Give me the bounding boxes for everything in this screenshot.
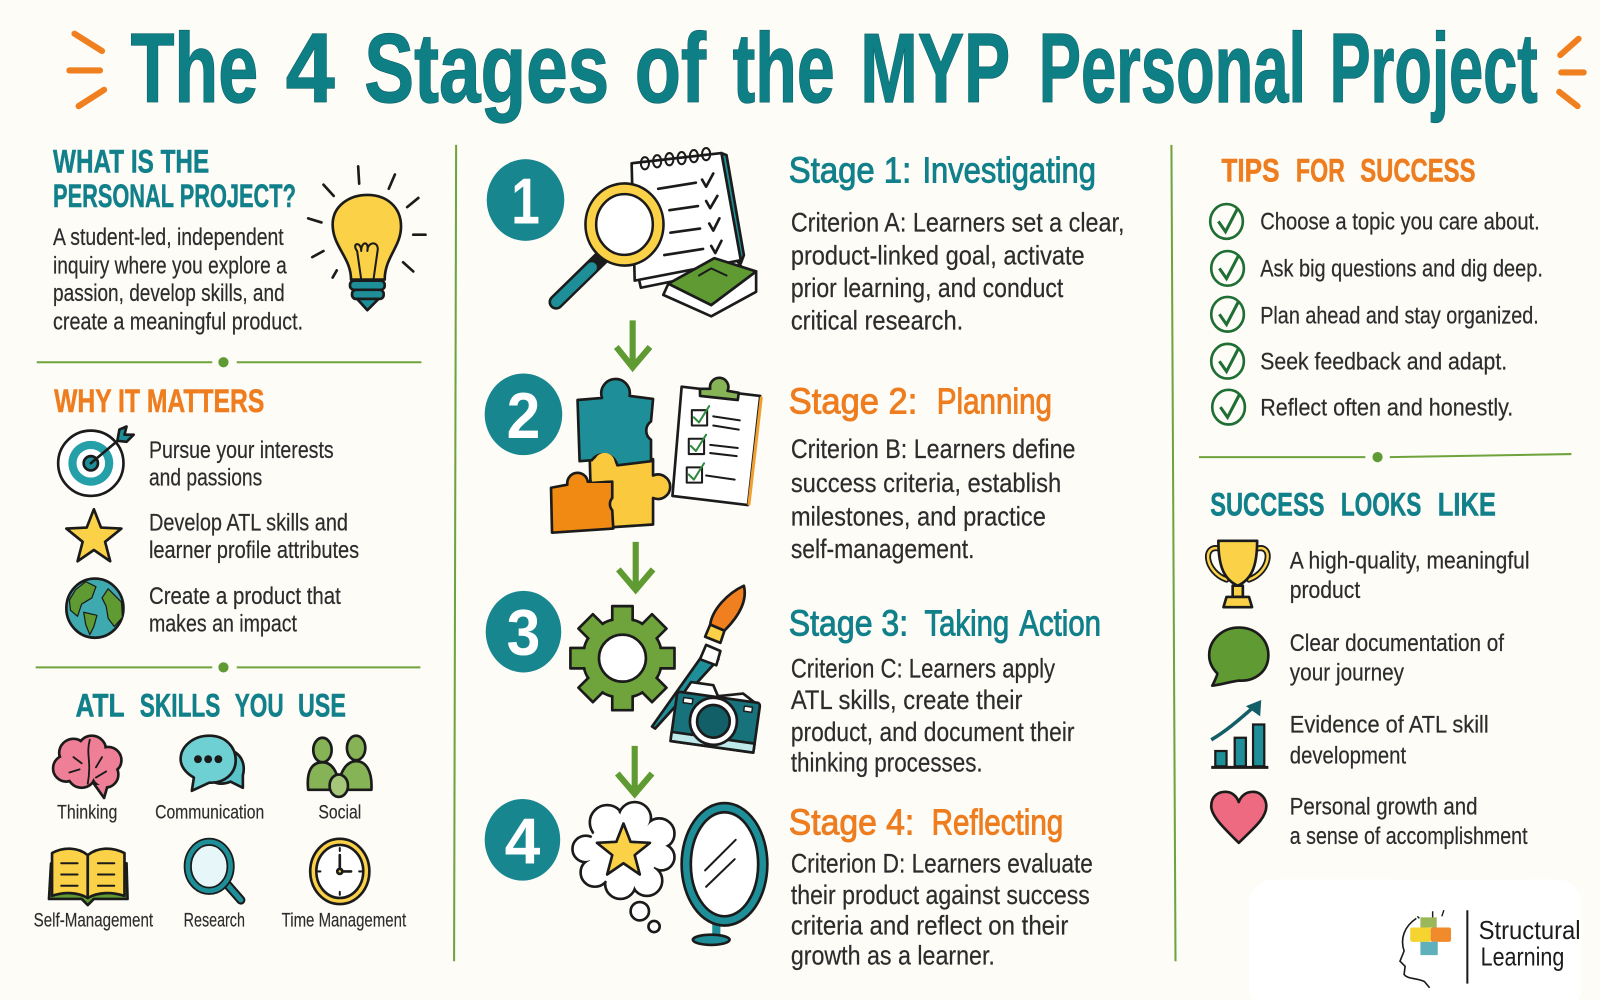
tip 4 bbox=[1211, 344, 1507, 379]
label: thinking: Thinking bbox=[57, 801, 117, 823]
text: criterion C: Criterion C: Learners apply bbox=[791, 654, 1056, 684]
logo wordmark bbox=[1479, 917, 1581, 971]
tip 3 bbox=[1211, 297, 1539, 332]
heading: success: SUCCESS bbox=[1210, 485, 1324, 522]
text: growth: Personal growth and bbox=[1290, 793, 1478, 820]
text: interests: and passions bbox=[149, 465, 262, 492]
tip 5 bbox=[1212, 390, 1513, 424]
text: interests bbox=[149, 437, 334, 492]
title: of bbox=[635, 13, 706, 123]
text: product impact: Create a product that bbox=[149, 583, 341, 610]
text: criterion D: criteria and reflect on their bbox=[791, 911, 1069, 941]
arrow: stage 1 to 2 bbox=[616, 320, 650, 367]
heading: stage 2 bbox=[789, 381, 1052, 421]
text: product: A high-quality, meaningful bbox=[1290, 547, 1530, 574]
icon: globe bbox=[66, 579, 123, 638]
icon: left title rays bbox=[69, 34, 104, 106]
heading: what is the personal project: WHAT IS THE bbox=[53, 142, 209, 179]
icon: brain bbox=[53, 736, 121, 798]
text: product: product bbox=[1290, 577, 1360, 604]
icon: clock bbox=[310, 839, 369, 904]
panel: tips for success bbox=[1210, 152, 1543, 424]
text block: definition: A student-led, independent bbox=[53, 224, 284, 251]
title: MYP bbox=[860, 13, 1010, 123]
icon: bar chart with arrow bbox=[1211, 700, 1268, 767]
icon: gear bbox=[570, 606, 674, 710]
text: criterion C: ATL skills, create their bbox=[791, 685, 1023, 715]
label: self-management: Self-Management bbox=[34, 910, 154, 932]
text block: definition: inquiry where you explore a bbox=[53, 252, 287, 279]
tip 1: Choose a topic you care about. bbox=[1260, 209, 1540, 236]
logo wordmark: Learning bbox=[1481, 943, 1564, 971]
notepad spiral bbox=[641, 148, 710, 169]
text: criterion A bbox=[791, 208, 1124, 336]
text: criterion B: Criterion B: Learners define bbox=[791, 434, 1076, 464]
panel: ATL skills you use bbox=[34, 686, 407, 932]
text: criterion B: self-management. bbox=[791, 534, 974, 564]
text: ATL skills: Develop ATL skills and bbox=[149, 510, 348, 537]
heading: what is the personal project bbox=[53, 142, 296, 214]
text: criterion B bbox=[791, 434, 1076, 564]
heading: stage 3: Stage 3: bbox=[789, 604, 908, 644]
title: Stages bbox=[364, 13, 609, 123]
icon: star bbox=[66, 509, 121, 561]
tip 2: Ask big questions and dig deep. bbox=[1260, 256, 1543, 283]
text block: definition: create a meaningful product. bbox=[53, 309, 303, 336]
text: ATL skills: learner profile attributes bbox=[149, 537, 359, 564]
tip 3: Plan ahead and stay organized. bbox=[1260, 302, 1539, 329]
text: criterion B: milestones, and practice bbox=[791, 502, 1046, 532]
panel: why it matters bbox=[54, 382, 359, 638]
tip 2 bbox=[1211, 251, 1543, 286]
number badge 2 bbox=[485, 373, 562, 455]
heading: stage 4: Stage 4: bbox=[789, 803, 914, 843]
title: Personal bbox=[1039, 13, 1306, 123]
text: criterion D: Criterion D: Learners evaluate bbox=[791, 848, 1093, 878]
number badge 2: 2 bbox=[507, 379, 540, 452]
heading: success: LOOKS bbox=[1341, 485, 1421, 522]
heading: success: LIKE bbox=[1438, 485, 1496, 522]
number badge 4: 4 bbox=[505, 804, 540, 877]
text: evidence: development bbox=[1290, 742, 1406, 769]
text: criterion D: their product against success bbox=[791, 880, 1090, 910]
tip 1 bbox=[1210, 204, 1540, 239]
text: criterion D: growth as a learner. bbox=[791, 940, 995, 970]
text: evidence bbox=[1290, 712, 1489, 769]
heading: stage 3: Taking bbox=[924, 604, 1009, 644]
title: The bbox=[131, 13, 258, 123]
heading: ATL skills: ATL bbox=[76, 686, 124, 723]
heading: stage 4: Reflecting bbox=[932, 803, 1063, 843]
icon: heart bbox=[1211, 792, 1266, 843]
heading: stage 3 bbox=[789, 604, 1101, 644]
number badge 3 bbox=[486, 591, 561, 672]
label: time management: Time Management bbox=[282, 910, 407, 932]
panel: stage 3 taking action bbox=[486, 586, 1101, 777]
icon: communication bubbles bbox=[181, 736, 244, 791]
text: product bbox=[1290, 547, 1530, 604]
heading: stage 4 bbox=[789, 803, 1063, 843]
heading: ATL skills: YOU bbox=[235, 686, 284, 723]
heading: stage 1 bbox=[789, 151, 1096, 191]
panel: what is the personal project bbox=[53, 142, 426, 336]
icon: trophy bbox=[1208, 541, 1268, 607]
panel: stage 1 investigating bbox=[487, 148, 1124, 336]
tip 5: Reflect often and honestly. bbox=[1260, 394, 1513, 421]
heading: ATL skills: USE bbox=[298, 686, 346, 723]
heading: success bbox=[1210, 485, 1496, 522]
text: interests: Pursue your interests bbox=[149, 437, 334, 464]
icon: head outline with blocks bbox=[1400, 910, 1451, 988]
icon: mirror bbox=[682, 803, 767, 945]
text: criterion C: product, and document their bbox=[791, 717, 1075, 747]
panel: Structural Learning logo bbox=[1249, 880, 1582, 1000]
text: ATL skills bbox=[149, 510, 359, 564]
icon: camera bbox=[670, 680, 762, 753]
text: criterion B: success criteria, establish bbox=[791, 468, 1061, 498]
icon: light bulb bbox=[308, 166, 426, 310]
panel: stage 2 planning bbox=[485, 373, 1076, 564]
icon: paintbrush bbox=[652, 586, 745, 729]
text block: definition: passion, develop skills, and bbox=[53, 280, 285, 307]
icon: clipboard checklist bbox=[672, 378, 761, 505]
icon: target bbox=[58, 427, 134, 496]
text: criterion C: thinking processes. bbox=[791, 747, 983, 777]
heading: tips: SUCCESS bbox=[1360, 152, 1476, 189]
number badge 1 bbox=[487, 159, 564, 241]
icon: speech bubble bbox=[1209, 628, 1268, 686]
title: 4 bbox=[286, 13, 335, 123]
text: evidence: Evidence of ATL skill bbox=[1290, 712, 1489, 739]
text: criterion A: critical research. bbox=[791, 306, 963, 336]
text: documentation bbox=[1290, 630, 1504, 687]
text: criterion A: Criterion A: Learners set a clear, bbox=[791, 208, 1124, 238]
text: product impact bbox=[149, 583, 341, 638]
text: documentation: your journey bbox=[1290, 660, 1405, 687]
title: the bbox=[733, 13, 835, 123]
text: criterion D bbox=[791, 848, 1093, 970]
heading: stage 1: Stage 1: bbox=[789, 151, 911, 191]
icon: thought cloud with star bbox=[572, 802, 674, 932]
tip 4: Seek feedback and adapt. bbox=[1260, 348, 1507, 375]
icon: notepad and magnifier with book bbox=[556, 148, 756, 316]
text block: definition bbox=[53, 224, 303, 336]
heading: stage 2: Stage 2: bbox=[789, 381, 917, 421]
arrow: stage 3 to 4 bbox=[617, 746, 652, 794]
heading: ATL skills: SKILLS bbox=[140, 686, 220, 723]
heading: ATL skills bbox=[76, 686, 346, 723]
title bbox=[131, 13, 1538, 123]
label: communication: Communication bbox=[155, 801, 264, 823]
text: criterion A: product-linked goal, activate bbox=[791, 240, 1085, 270]
heading: stage 1: Investigating bbox=[922, 151, 1096, 191]
panel: success looks like bbox=[1208, 485, 1530, 850]
number badge 1: 1 bbox=[511, 164, 540, 237]
heading: what is the personal project: PERSONAL PROJECT? bbox=[53, 177, 296, 214]
number badge 4 bbox=[485, 799, 560, 881]
number badge 3: 3 bbox=[507, 596, 540, 669]
icon: research magnifier bbox=[188, 842, 241, 900]
text: product impact: makes an impact bbox=[149, 611, 297, 638]
icon: open book bbox=[49, 849, 128, 905]
logo wordmark: Structural bbox=[1479, 917, 1581, 945]
text: growth bbox=[1290, 793, 1528, 850]
label: research: Research bbox=[184, 910, 245, 932]
text: growth: a sense of accomplishment bbox=[1290, 823, 1528, 850]
text: criterion C bbox=[791, 654, 1075, 777]
label: social: Social bbox=[318, 801, 361, 823]
arrow: stage 2 to 3 bbox=[618, 542, 653, 590]
heading: tips: TIPS bbox=[1221, 152, 1280, 189]
text: criterion A: prior learning, and conduct bbox=[791, 273, 1064, 303]
heading: stage 2: Planning bbox=[937, 381, 1052, 421]
heading: stage 3: Action bbox=[1019, 604, 1101, 644]
icon: right title rays bbox=[1559, 39, 1584, 106]
text: documentation: Clear documentation of bbox=[1290, 630, 1504, 657]
icon: social people bbox=[308, 736, 372, 797]
heading: tips bbox=[1221, 152, 1476, 189]
panel: stage 4 reflecting bbox=[485, 799, 1093, 970]
icon: puzzle pieces bbox=[551, 379, 670, 533]
heading: tips: FOR bbox=[1296, 152, 1345, 189]
heading: why it matters: WHY IT MATTERS bbox=[54, 382, 264, 419]
